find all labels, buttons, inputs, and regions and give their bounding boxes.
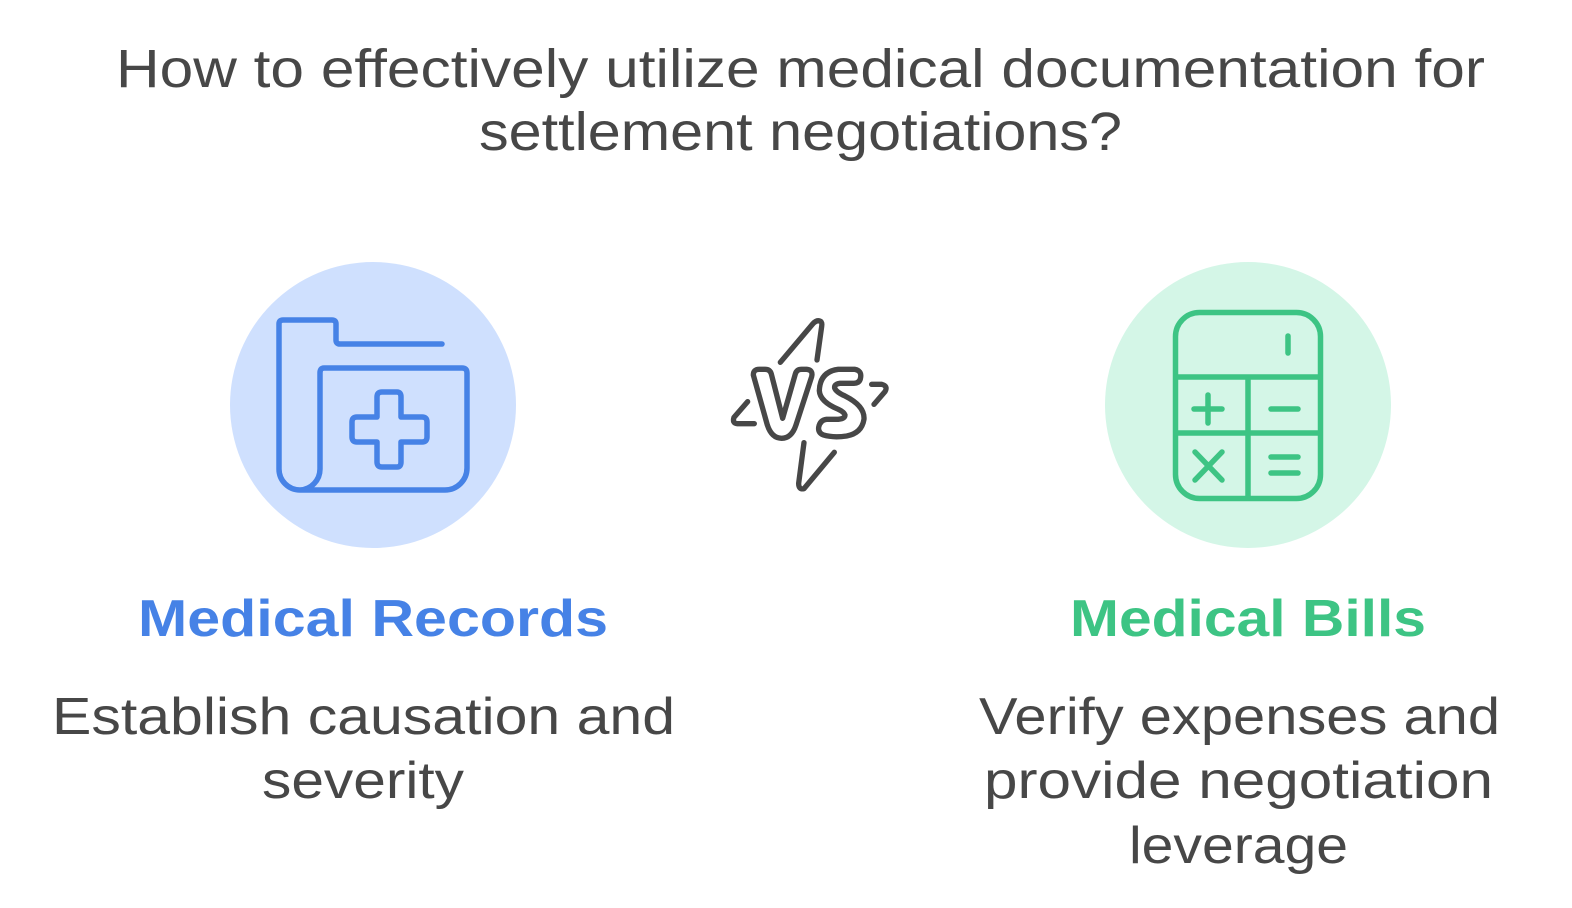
- title: [116, 39, 1485, 162]
- panel: medical records: [52, 262, 675, 810]
- text: medical bills description: leverage: [1129, 817, 1348, 875]
- heading: medical bills: Medical Bills: [1070, 590, 1426, 648]
- panel: medical bills: [979, 262, 1500, 875]
- title: How to effectively utilize medical documentation for: [116, 39, 1485, 99]
- text: medical bills description: [979, 688, 1500, 875]
- icon: versus lightning: [733, 321, 886, 489]
- text: medical records description: Establish causation and: [52, 688, 675, 746]
- text: medical bills description: Verify expenses and: [979, 688, 1500, 746]
- title: settlement negotiations?: [479, 102, 1122, 162]
- heading: medical records: Medical Records: [138, 590, 608, 648]
- icon: calculator in green circle: [1105, 262, 1391, 548]
- text: medical records description: severity: [262, 752, 464, 810]
- icon: medical folder in blue circle: [230, 262, 516, 548]
- text: medical bills description: provide negotiation: [984, 752, 1493, 810]
- text: medical records description: [52, 688, 675, 810]
